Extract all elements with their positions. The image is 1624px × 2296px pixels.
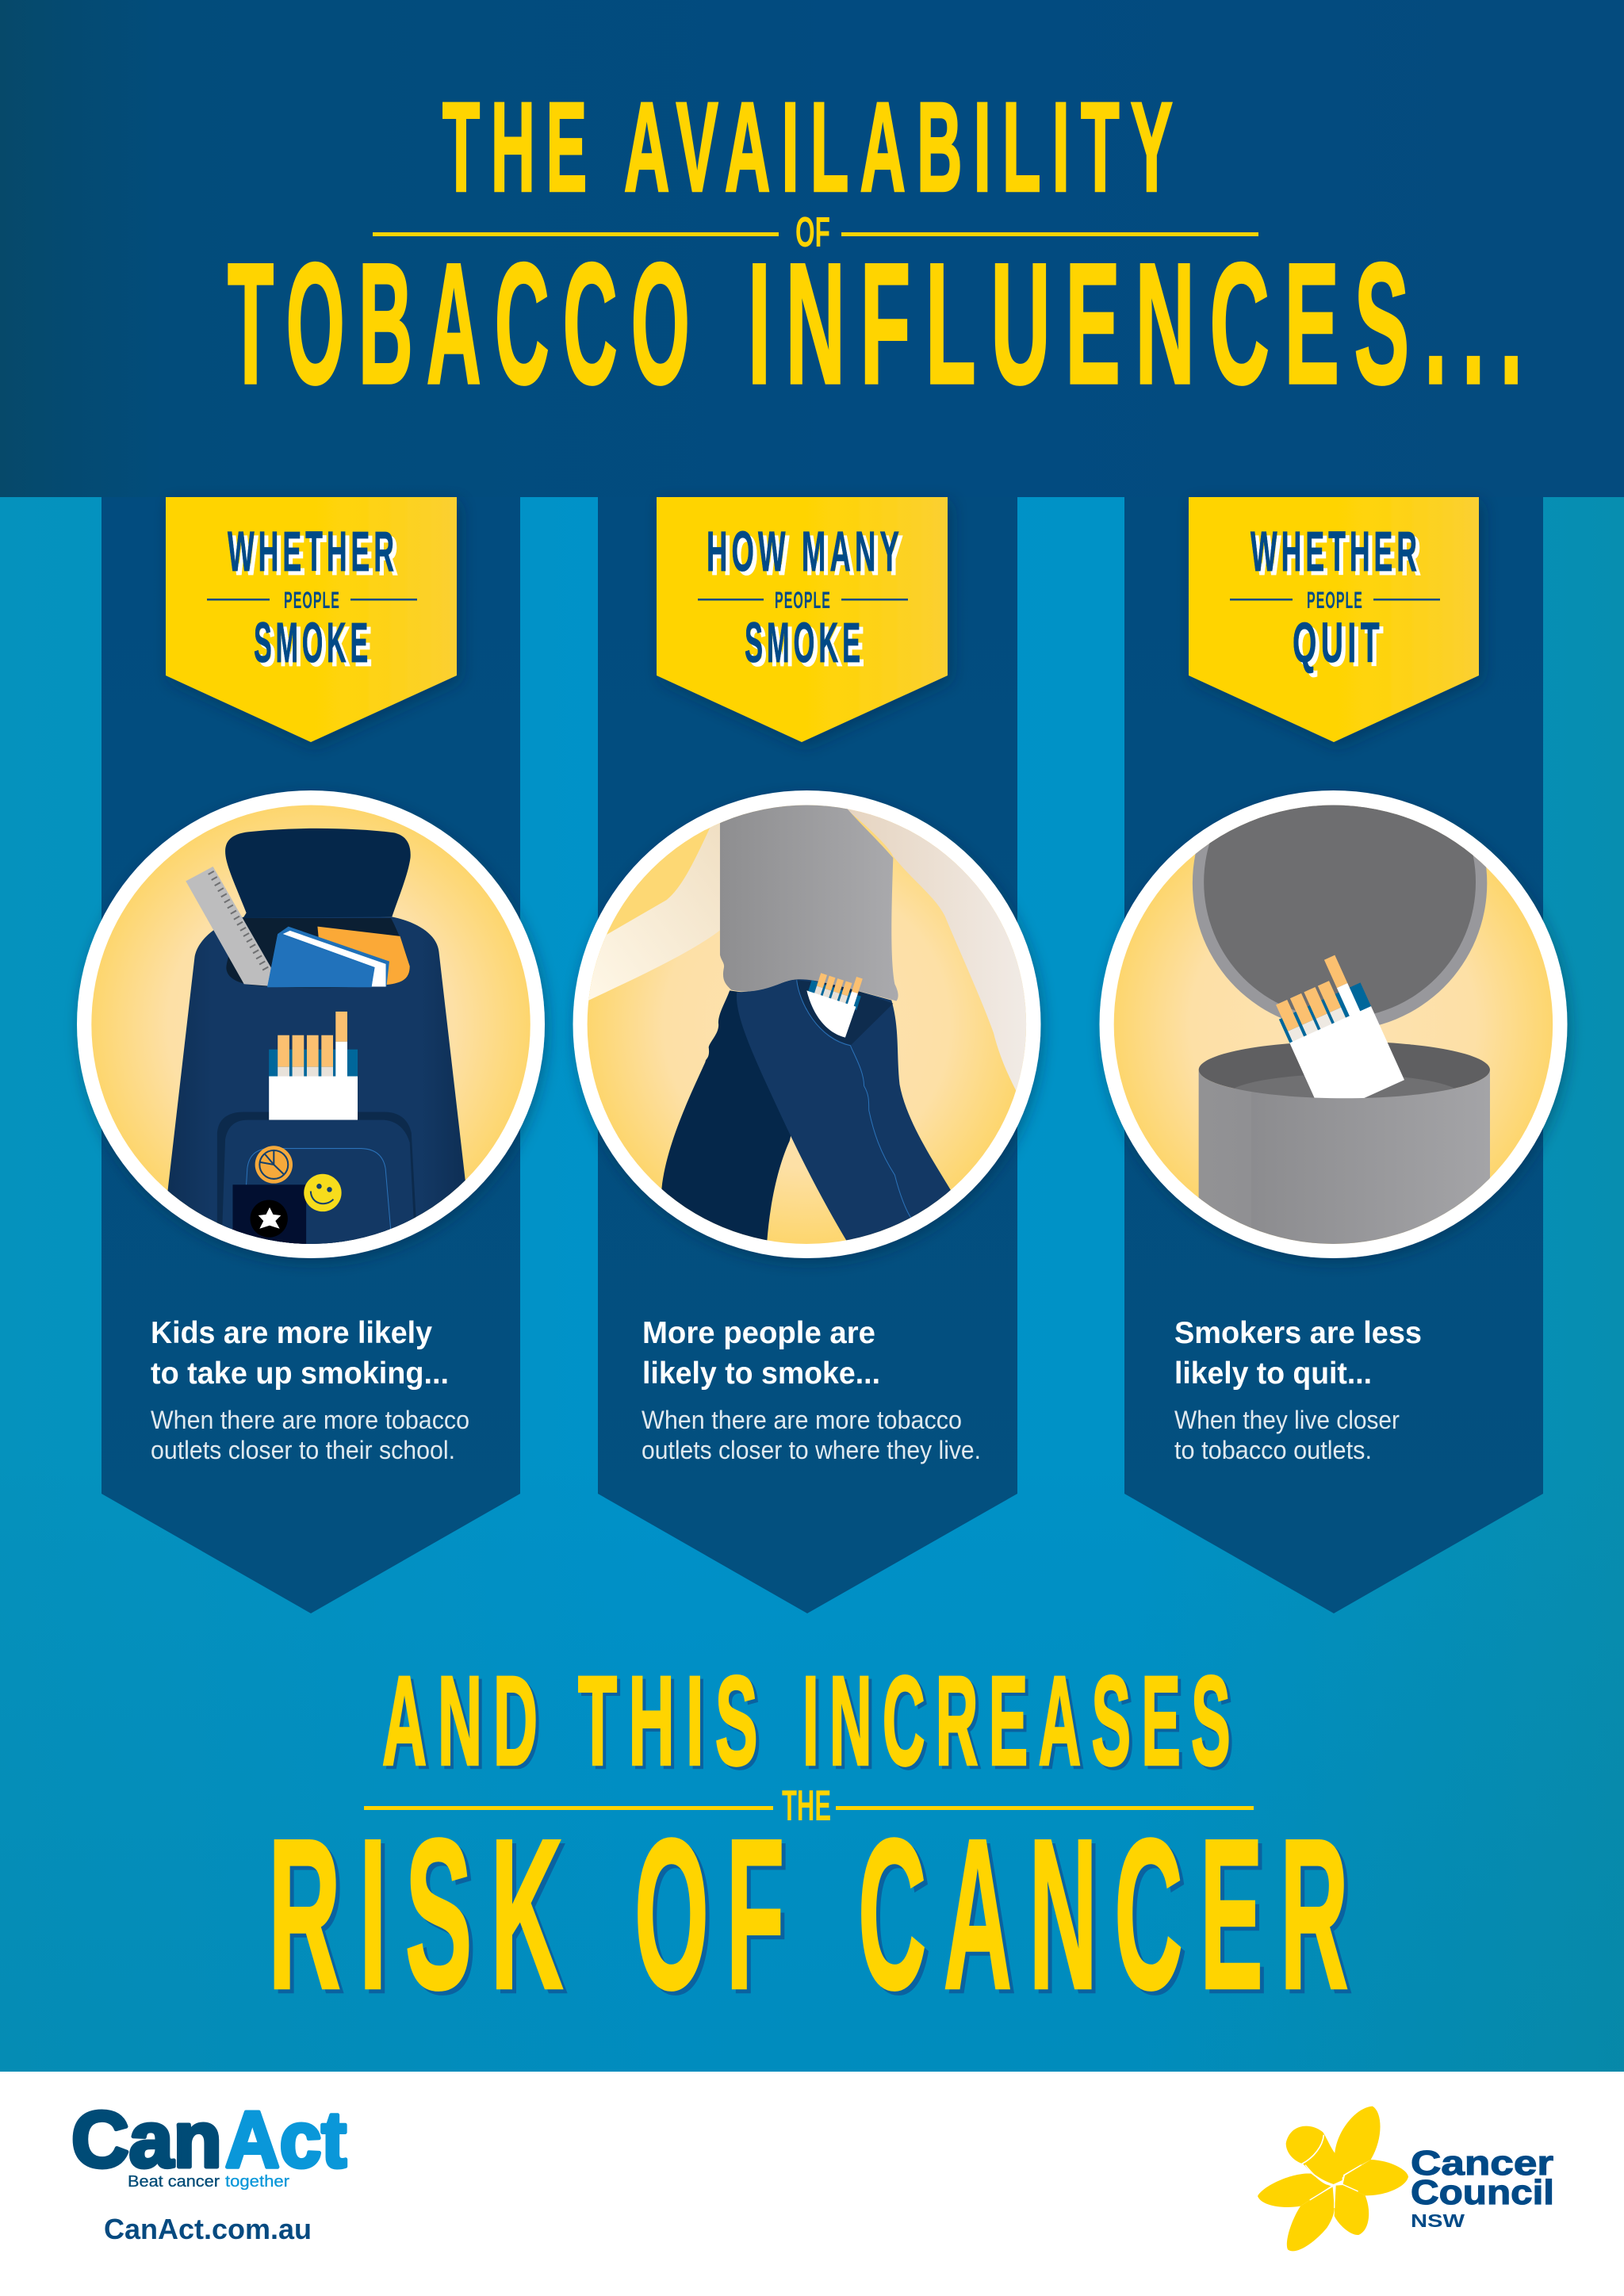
title: OF [795, 209, 830, 256]
badge heading: SMOKE [749, 616, 868, 679]
badge heading: QUIT [1293, 612, 1384, 675]
badge heading: WHETHER [1251, 521, 1421, 584]
badge heading: HOW MANY [710, 525, 907, 587]
badge heading [657, 497, 948, 742]
conclusion heading [268, 1649, 1369, 2038]
conclusion heading: AND [382, 1649, 549, 1792]
badge heading: SMOKE [745, 612, 864, 675]
text block: outlets closer to where they live. [642, 1436, 981, 1464]
badge heading: PEOPLE [1307, 587, 1363, 614]
ribbon [102, 497, 520, 1613]
logo: Cancer Council NSW: Council [1411, 2173, 1554, 2212]
heading shadow: AND [385, 1652, 552, 1795]
text block: to take up smoking... [151, 1357, 449, 1391]
badge heading: WHETHER [228, 521, 398, 584]
ribbon [1124, 497, 1543, 1613]
badge heading: PEOPLE [284, 587, 340, 614]
logo: CanAct: CanAct.com.au [104, 2213, 312, 2245]
text block: When there are more tobacco [151, 1406, 469, 1434]
panel: whether people quit [1099, 497, 1567, 1613]
text block [1174, 1316, 1422, 1464]
illustration: person with pack in jeans pocket [573, 790, 1042, 1269]
heading shadow: OF [638, 1800, 806, 2038]
text block: When they live closer [1174, 1406, 1400, 1434]
footer band [0, 2072, 1624, 2296]
badge heading [166, 497, 457, 742]
logo: CanAct: Beat cancer [128, 2173, 220, 2191]
title: TOBACCO [228, 228, 703, 419]
panel: whether people smoke [77, 497, 545, 1613]
badge heading: SMOKE [258, 616, 376, 679]
text block: outlets closer to their school. [151, 1436, 455, 1464]
text block: to tobacco outlets. [1174, 1436, 1372, 1464]
text block: Kids are more likely [151, 1316, 433, 1350]
panel: how many people smoke [573, 497, 1042, 1613]
badge heading [1189, 497, 1479, 742]
title: THE [442, 76, 598, 217]
text block: Smokers are less [1174, 1316, 1422, 1350]
ribbon [598, 497, 1017, 1613]
title [228, 76, 1538, 419]
illustration: pack in rubbish bin [1099, 736, 1567, 1262]
illustration: backpack [77, 790, 545, 1282]
badge heading: SMOKE [254, 612, 372, 675]
conclusion heading: OF [634, 1795, 802, 2034]
logo: Cancer Council NSW: NSW [1411, 2210, 1465, 2231]
badge heading: QUIT [1297, 616, 1388, 679]
conclusion heading: THE [782, 1781, 831, 1830]
logo: CanAct [71, 2095, 347, 2245]
heading shadow: RISK [272, 1800, 585, 2038]
conclusion heading: THIS [578, 1649, 769, 1792]
text block [642, 1316, 981, 1464]
text block: When there are more tobacco [642, 1406, 962, 1434]
badge heading: WHETHER [1254, 525, 1425, 587]
logo: CanAct: Act [225, 2095, 347, 2184]
logo: CanAct: Can [71, 2095, 222, 2184]
conclusion heading: RISK [268, 1795, 581, 2034]
heading shadow: THIS [581, 1652, 772, 1795]
heading shadow [272, 1652, 1369, 2038]
logo: Cancer Council NSW [1258, 2107, 1554, 2251]
text block [151, 1316, 469, 1464]
badge heading: PEOPLE [775, 587, 831, 614]
badge heading: HOW MANY [707, 521, 903, 584]
text block: likely to quit... [1174, 1357, 1372, 1391]
icon: daffodil [1258, 2107, 1408, 2251]
badge heading: WHETHER [232, 525, 402, 587]
logo: CanAct: together [225, 2173, 289, 2191]
logo: Cancer Council NSW: Cancer [1411, 2144, 1553, 2183]
header band [0, 0, 1624, 497]
text block: likely to smoke... [642, 1357, 880, 1391]
text block: More people are [642, 1316, 875, 1350]
